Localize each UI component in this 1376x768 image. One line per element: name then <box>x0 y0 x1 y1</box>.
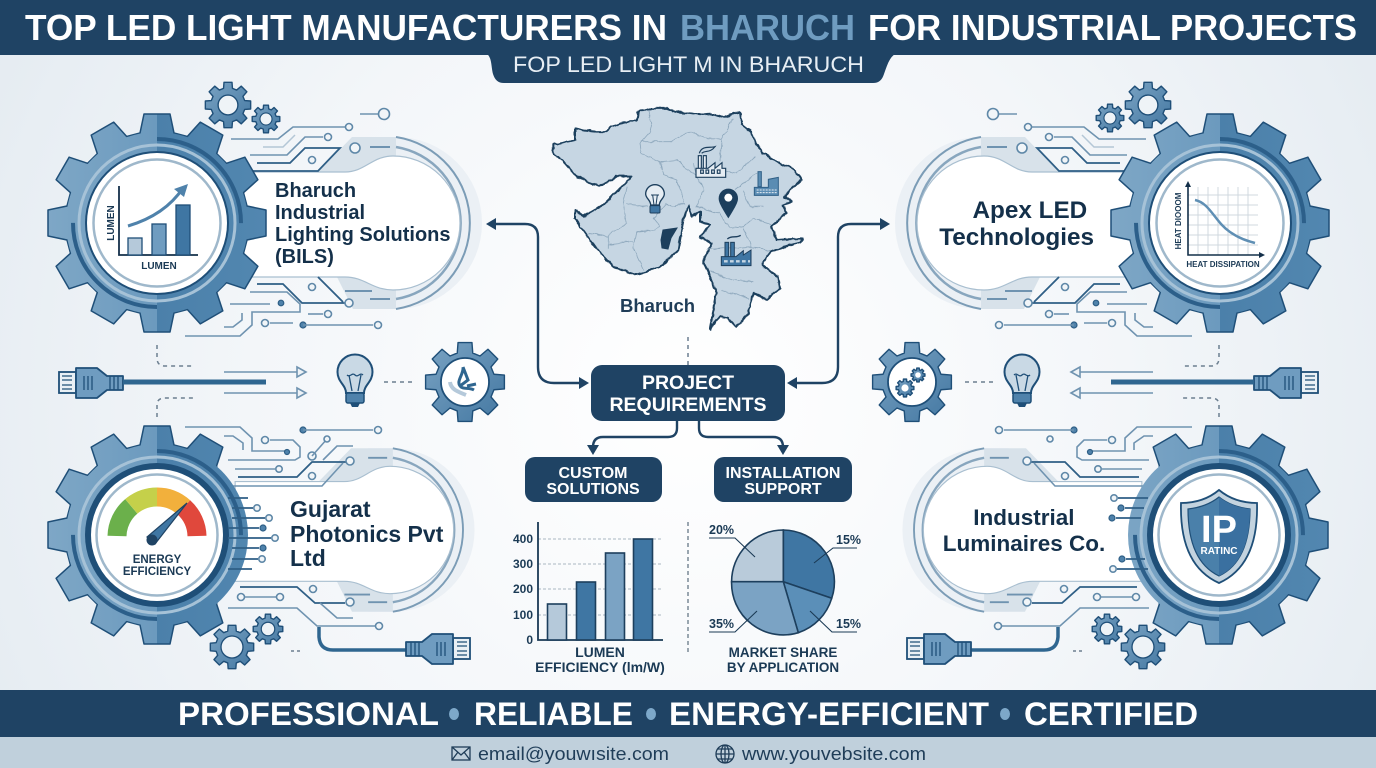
icon: large gear with energy gauge <box>66 444 248 626</box>
title <box>25 7 1357 48</box>
bar chart: lumen efficiency: EFFICIENCY (lm/W) <box>535 659 665 675</box>
title: BHARUCH <box>680 7 855 48</box>
energy efficiency gauge: EFFICIENCY <box>123 566 192 578</box>
panel: Industrial Luminaires Co. <box>902 426 1328 644</box>
title: FOR INDUSTRIAL PROJECTS <box>868 7 1357 48</box>
arrow: to custom solutions <box>587 421 677 455</box>
icon: small gears top right <box>1096 82 1171 132</box>
icon: large gear with lumen chart <box>48 114 266 332</box>
subtitle tab <box>487 52 895 83</box>
divider <box>687 522 689 652</box>
company name: (BILS) <box>275 246 334 268</box>
box: project requirements: REQUIREMENTS <box>609 394 767 416</box>
pie chart: market share: MARKET SHARE <box>729 645 837 660</box>
icon: small gears bottom right <box>1073 614 1165 669</box>
panel: Apex LED Technologies <box>895 108 1329 336</box>
lumen bar chart: LUMEN <box>106 205 117 241</box>
lumen bar chart <box>106 184 198 272</box>
bar chart: lumen efficiency <box>513 522 665 675</box>
panel: Bharuch Industrial Lighting Solutions <box>48 108 482 336</box>
banner: values: PROFESSIONAL <box>178 696 439 732</box>
box: installation support: INSTALLATION <box>726 465 840 482</box>
company name: Gujarat <box>290 496 371 522</box>
arrow: right company to requirements <box>787 218 890 389</box>
company name: Luminaires Co. <box>943 531 1105 556</box>
box: custom solutions: CUSTOM <box>558 465 628 482</box>
icon: dark factory <box>721 235 751 266</box>
heat dissipation chart: HEAT DISSIPATION <box>1186 260 1260 269</box>
icon: small gears bottom left <box>210 614 303 669</box>
box: custom solutions: SOLUTIONS <box>546 481 640 498</box>
icon: small gears top left <box>205 82 280 133</box>
box: installation support <box>714 457 852 502</box>
IP rating shield: IP <box>1201 509 1237 551</box>
connector: map to requirements <box>687 337 689 365</box>
IP rating shield: RATINC <box>1200 546 1238 557</box>
cable row right <box>965 345 1318 417</box>
banner: values: ENERGY-EFFICIENT <box>669 696 989 732</box>
website address: www.youvebsite.com <box>741 744 926 764</box>
bottom plug right <box>907 627 1058 664</box>
email address: email@youwısite.com <box>478 744 669 764</box>
box: installation support: SUPPORT <box>744 481 822 498</box>
arrow: left company to requirements <box>486 218 589 389</box>
icon: Bharuch district marker <box>661 228 677 249</box>
panel: Gujarat Photonics Pvt Ltd <box>48 426 475 644</box>
pie chart: market share: 20% <box>709 523 734 537</box>
heat dissipation chart: HEAT DIOOOM <box>1174 192 1183 249</box>
label: Bharuch: Bharuch <box>620 295 695 316</box>
title: TOP LED LIGHT MANUFACTURERS IN <box>25 7 667 48</box>
banner: values: RELIABLE <box>474 696 633 732</box>
arrow: to installation support <box>699 421 789 455</box>
company name: Industrial <box>275 202 365 224</box>
lumen bar chart: LUMEN <box>141 261 177 272</box>
icon: blue factory <box>754 172 778 195</box>
connector lines on gear <box>1109 495 1148 572</box>
icon: bulb on map <box>646 185 664 213</box>
banner: values <box>0 690 1376 737</box>
icon: factory outline <box>696 147 726 177</box>
bottom plug left <box>319 627 470 664</box>
subtitle tab: FOP LED LIGHT M IN BHARUCH <box>513 52 864 77</box>
company name: Photonics Pvt <box>290 521 444 547</box>
company name: Industrial <box>973 505 1074 530</box>
company name: Apex LED <box>972 197 1087 224</box>
bar chart: lumen efficiency: 100 <box>513 608 533 622</box>
company name: Lighting Solutions <box>275 224 451 246</box>
pie chart: market share <box>709 523 861 675</box>
icon: light bulb right <box>1004 354 1040 407</box>
icon: location pin <box>719 189 738 218</box>
cable row left <box>59 345 412 417</box>
pie chart: market share: BY APPLICATION <box>727 660 839 675</box>
company name: Ltd <box>290 545 326 571</box>
icon: medium gear left <box>426 343 504 421</box>
map: Gujarat with Bharuch <box>553 108 802 328</box>
bar chart: lumen efficiency: LUMEN <box>575 644 625 660</box>
banner: values: CERTIFIED <box>1024 696 1198 732</box>
bar chart: lumen efficiency: 300 <box>513 557 533 571</box>
bar chart: lumen efficiency: 0 <box>526 633 533 647</box>
icon: email <box>452 747 470 760</box>
energy efficiency gauge: ENERGY <box>133 554 182 566</box>
bar chart: lumen efficiency: 400 <box>513 532 533 546</box>
bar chart: lumen efficiency: 200 <box>513 582 533 596</box>
icon: large gear with IP rating shield <box>1128 444 1310 626</box>
box: project requirements: PROJECT <box>642 372 734 394</box>
heat dissipation chart <box>1174 181 1265 269</box>
pie chart: market share: 15% <box>836 533 861 547</box>
company name: Technologies <box>939 224 1094 251</box>
icon: light bulb left <box>338 354 372 407</box>
box: custom solutions <box>525 457 662 502</box>
header band <box>0 0 1376 55</box>
footer contact strip <box>0 737 1376 768</box>
IP rating shield <box>1181 490 1257 583</box>
icon: medium gear right <box>873 343 951 421</box>
box: project requirements <box>591 365 785 421</box>
energy efficiency gauge <box>117 497 197 578</box>
pie chart: market share: 35% <box>709 617 734 631</box>
pie chart: market share: 15% <box>836 617 861 631</box>
icon: globe <box>716 745 734 763</box>
icon: large gear with heat chart <box>1111 114 1329 332</box>
connector lines on gear <box>228 498 278 569</box>
company name: Bharuch <box>275 180 356 202</box>
